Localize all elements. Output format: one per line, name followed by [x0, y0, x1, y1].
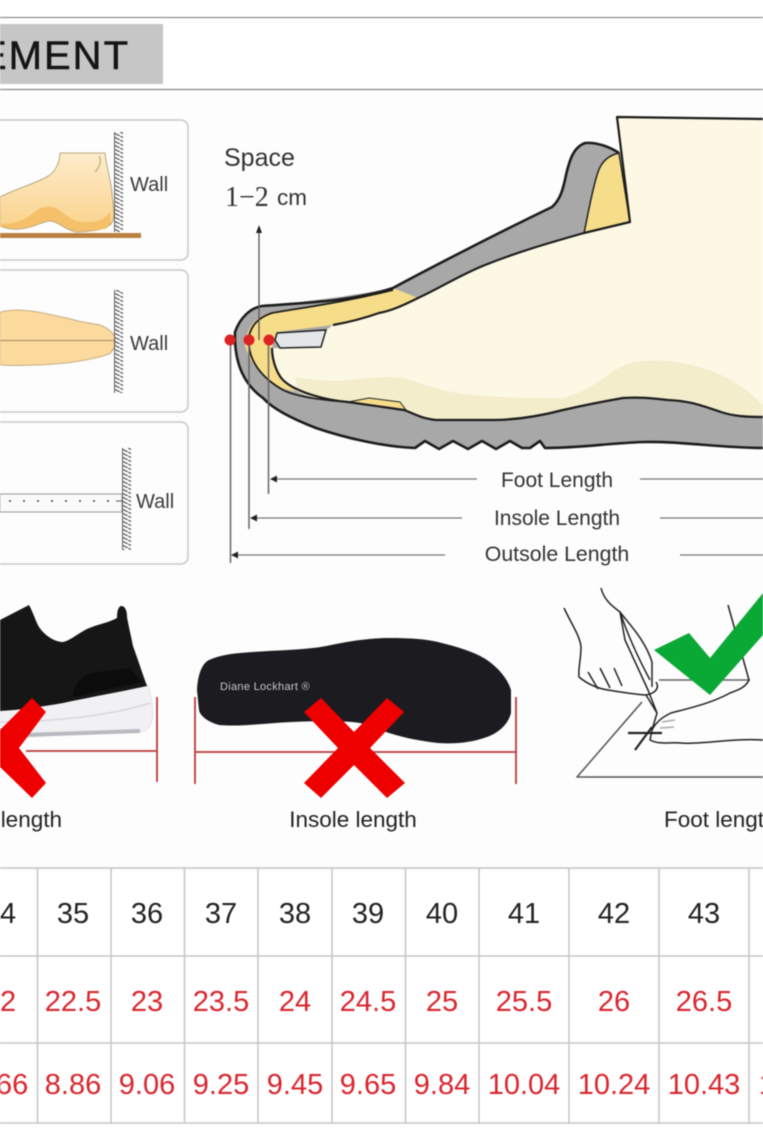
table row: EU sizes: 38: [279, 898, 311, 930]
icon: ruler: [0, 494, 122, 512]
dimension: outsole length: Outsole Length: [485, 542, 629, 566]
panel: shoe length wrong method: [0, 605, 157, 832]
sole and upper grey: [235, 143, 763, 449]
table row: inches: 9.84: [414, 1069, 470, 1101]
panel: ruler against wall: [0, 422, 188, 564]
label: wall: Wall: [130, 333, 168, 355]
size table: [0, 868, 763, 1123]
label: insole length: Insole length: [289, 807, 417, 832]
icon: wall hatch: [114, 132, 123, 232]
table row: centimetres: 25: [426, 986, 458, 1018]
dimension: insole length: Insole Length: [494, 507, 620, 530]
table row: inches: 9.45: [267, 1069, 323, 1101]
icon: wall hatch: [114, 290, 123, 393]
table row: EU sizes: 39: [352, 898, 384, 930]
table row: EU sizes: [0, 898, 720, 930]
yellow heel lining: [584, 153, 630, 233]
dimension: insole length: [250, 507, 763, 530]
dimension line: [195, 697, 516, 784]
dimension: foot length: [270, 469, 763, 492]
table row: EU sizes: 43: [688, 898, 720, 930]
label: shoe length: length: [1, 807, 62, 832]
yellow arch patch: [348, 398, 406, 410]
panel: heel against wall side view: [0, 120, 188, 260]
dimension: outsole length: [231, 542, 763, 566]
table row: EU sizes: 41: [508, 898, 540, 930]
yellow lining upper: [245, 288, 418, 392]
table row: inches: 9.06: [119, 1069, 175, 1101]
label: space 1-2 cm: 1−2: [225, 182, 269, 213]
table row: EU sizes: 36: [131, 898, 163, 930]
table row: inches: 10.04: [488, 1069, 560, 1101]
table row: centimetres: 23.5: [193, 986, 249, 1018]
table row: inches: 9.25: [193, 1069, 249, 1101]
panel: insole length wrong method: [195, 638, 516, 832]
arrow: space indicator: [256, 225, 262, 340]
table row: inches: 10.43: [668, 1069, 740, 1101]
foot shade: [295, 360, 763, 420]
table row: inches: [0, 1069, 763, 1101]
icon: foot side view: [0, 153, 114, 232]
table row: centimetres: 24.5: [340, 986, 396, 1018]
icon: black insole: [197, 638, 511, 743]
icon: hand tracing foot on paper: [564, 588, 763, 777]
panel: foot length correct method: [564, 588, 763, 832]
dimension guides with red points: [224, 225, 274, 563]
table row: centimetres: 22.5: [45, 986, 101, 1018]
table grid: [0, 868, 763, 1123]
table row: centimetres: 24: [279, 986, 311, 1018]
cross-section: foot in shoe: [235, 117, 763, 449]
panel: foot top view against wall: [0, 270, 188, 412]
dimension line: [26, 697, 157, 782]
outlines: [235, 117, 763, 449]
table row: EU sizes: 40: [426, 898, 458, 930]
table row: centimetres: 26: [598, 986, 630, 1018]
icon: floor: [0, 233, 141, 238]
heading: measurement banner: [0, 24, 163, 84]
table row: centimetres: [0, 986, 732, 1018]
label: space 1-2 cm: Space: [224, 144, 295, 172]
table row: EU sizes: 42: [598, 898, 630, 930]
label: wall: Wall: [130, 174, 168, 196]
table row: centimetres: 23: [131, 986, 163, 1018]
icon: green check: [654, 593, 763, 695]
label: space 1-2 cm: [224, 144, 307, 213]
red points: [224, 334, 274, 346]
label: insole brand: Diane Lockhart ®: [220, 681, 310, 693]
table row: centimetres: 25.5: [496, 986, 552, 1018]
icon: red cross: [304, 698, 405, 798]
label: space 1-2 cm: cm: [277, 185, 307, 210]
icon: foot top view: [0, 310, 115, 365]
table row: inches: 8.86: [45, 1069, 101, 1101]
dimension: foot length: Foot Length: [501, 469, 613, 492]
table row: EU sizes: 35: [57, 898, 89, 930]
foot cream: [272, 117, 763, 420]
toe nail: [275, 330, 326, 348]
icon: wall hatch: [122, 448, 131, 550]
icon: black shoe: [0, 605, 153, 737]
table row: centimetres: 26.5: [676, 986, 732, 1018]
table row: inches: 9.65: [340, 1069, 396, 1101]
table row: EU sizes: 37: [205, 898, 237, 930]
icon: red cross: [0, 698, 46, 798]
label: wall: Wall: [136, 491, 174, 513]
table row: inches: 10.24: [578, 1069, 650, 1101]
